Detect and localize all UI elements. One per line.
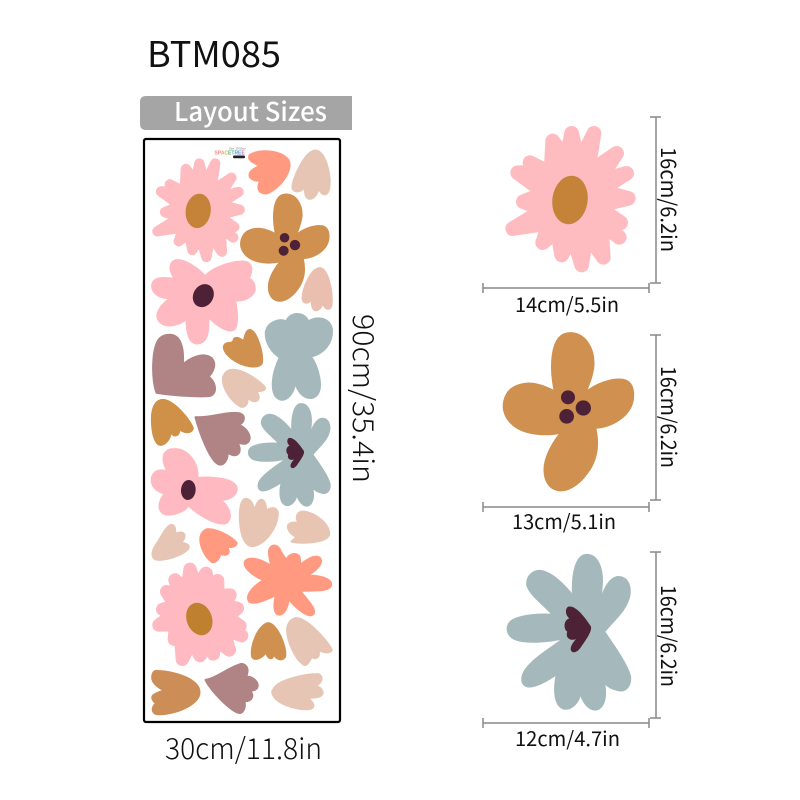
height dimension line — [650, 335, 661, 500]
sticker: blue flower — [249, 404, 330, 506]
sticker: beige tulip — [240, 499, 278, 546]
sticker: pink daisy top — [157, 164, 240, 257]
panel: pink daisy detail — [483, 117, 684, 318]
sticker: pink butterfly flower — [152, 260, 255, 343]
heading: layout sizes bar: Layout Sizes — [174, 92, 327, 129]
width label: 13cm/5.1in — [512, 506, 616, 535]
sticker: coral star flower — [245, 546, 331, 615]
sticker: small beige petal — [303, 268, 332, 310]
sticker: beige petal bottom right — [287, 618, 332, 665]
sticker: pink flower — [152, 449, 237, 523]
width dimension line — [483, 283, 649, 293]
width label: 12cm/4.7in — [515, 723, 620, 752]
height label: 16cm/6.2in — [654, 366, 684, 468]
height label: 16cm/6.2in — [654, 585, 684, 687]
sticker: golden petal — [152, 400, 193, 445]
height label: 16cm/6.2in — [654, 147, 684, 252]
sheet frame — [144, 139, 340, 722]
brand logo: Size: 30*90cm — [229, 146, 246, 150]
sticker: mauve petal bottom — [206, 664, 258, 713]
title: product code: BTM085 — [147, 27, 281, 78]
sticker: blue four-lobed flower — [266, 314, 332, 399]
large blue flower — [508, 555, 630, 709]
panel: brown flower detail — [483, 333, 684, 535]
sheet height label: 90cm/35.4in — [344, 314, 386, 483]
large pink daisy — [513, 133, 628, 265]
panel: sticker sheet layout — [144, 139, 340, 722]
sticker: beige petal middle — [223, 370, 265, 407]
sticker: coral petal top — [249, 151, 289, 193]
sticker: beige petal bottom — [272, 674, 322, 709]
sticker: mauve petal middle — [196, 413, 249, 464]
sheet width label: 30cm/11.8in — [165, 726, 322, 768]
sticker: orange petal bottom — [252, 623, 285, 659]
sticker: brown flower — [241, 194, 329, 301]
brand logo: SPACETREE — [214, 150, 245, 156]
height dimension line — [650, 552, 661, 718]
width dimension line — [483, 502, 649, 512]
sticker: orange wide petal — [152, 671, 199, 714]
height dimension line — [650, 117, 661, 283]
sticker: beige petal left — [153, 525, 189, 560]
large brown flower — [504, 333, 633, 490]
width label: 14cm/5.5in — [515, 289, 619, 318]
panel: blue flower detail — [483, 552, 684, 752]
sticker: beige petal right — [288, 512, 329, 543]
sticker: orange small petal — [224, 330, 262, 366]
sticker: pink daisy bottom — [159, 569, 242, 659]
width dimension line — [483, 718, 649, 728]
sticker: mauve heart petal — [153, 335, 215, 396]
sticker: beige petal top — [293, 151, 330, 199]
sticker: coral small petal — [200, 529, 237, 562]
brand logo — [214, 146, 246, 158]
